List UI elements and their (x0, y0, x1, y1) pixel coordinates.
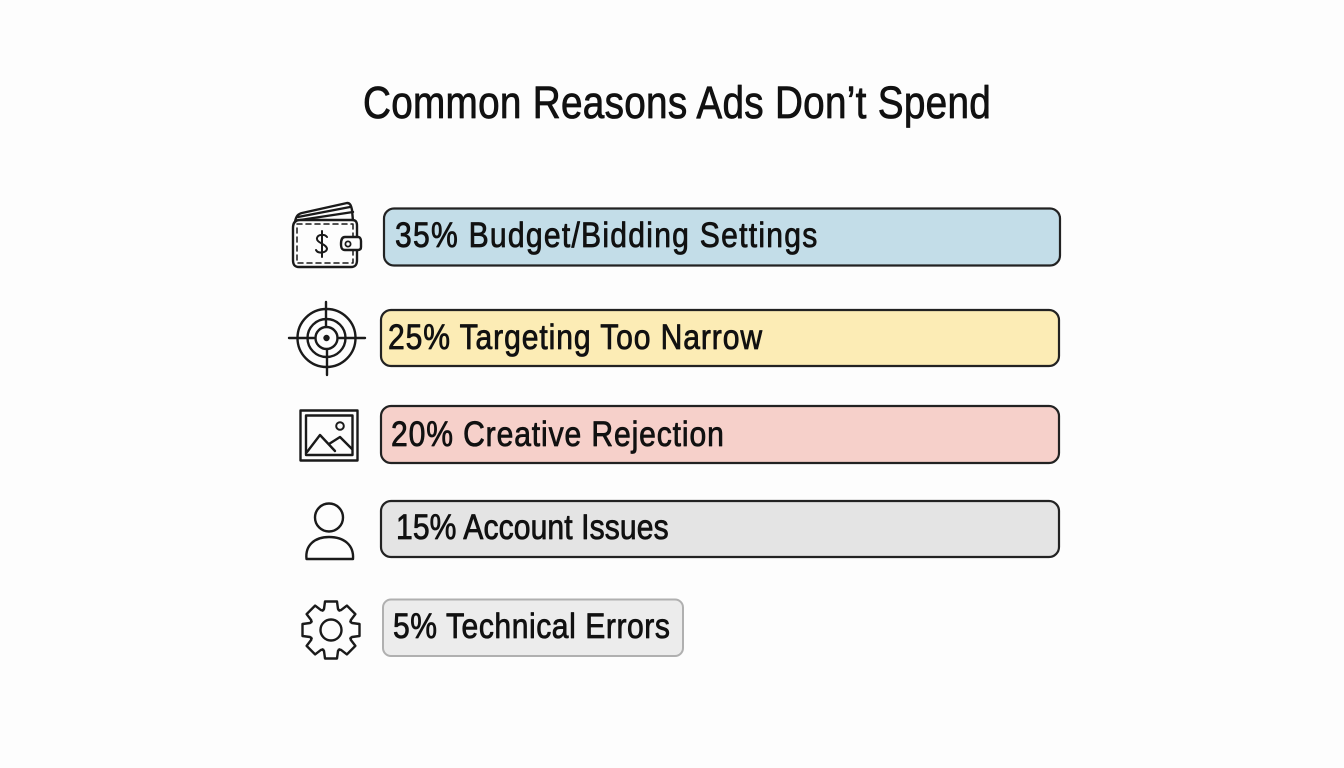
row: account issues (306, 501, 1059, 559)
bar: 5% (383, 600, 683, 656)
icon: target (289, 302, 365, 375)
row: targeting too narrow (289, 302, 1059, 375)
bar: 35% (384, 208, 1060, 266)
icon: person (306, 504, 353, 559)
row: technical errors (302, 600, 683, 658)
icon: image (300, 410, 358, 460)
row: budget/bidding settings (293, 203, 1060, 267)
title: Common Reasons Ads Don’t Spend (363, 77, 991, 128)
bar: 20% (381, 406, 1059, 463)
bar: 15% (381, 501, 1059, 557)
bar: 25% (381, 310, 1059, 366)
row: creative rejection (300, 406, 1059, 463)
label: 5% Technical Errors: 5% Technical Errors (393, 606, 670, 646)
label: 15% Account Issues: 15% Account Issues (396, 507, 669, 547)
label: 20% Creative Rejection: 20% Creative Rejection (391, 414, 724, 454)
icon: wallet (293, 203, 361, 267)
label: 25% Targeting Too Narrow: 25% Targeting Too Narrow (388, 317, 763, 357)
icon: gear (302, 602, 360, 658)
label: 35% Budget/Bidding Settings: 35% Budget/Bidding Settings (395, 215, 817, 255)
